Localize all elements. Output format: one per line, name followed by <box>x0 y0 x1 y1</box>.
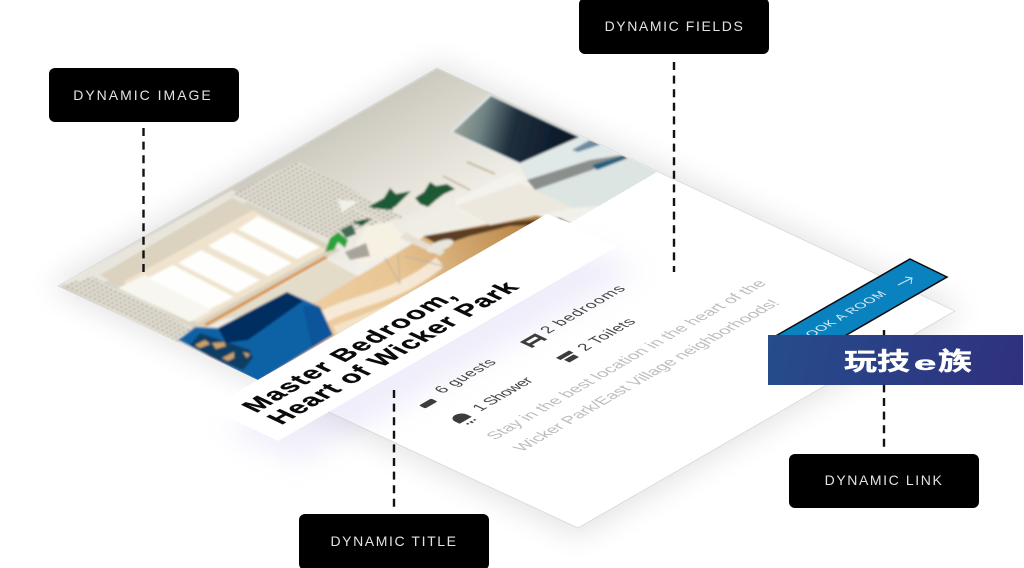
label: dynamic fields: DYNAMIC FIELDS <box>605 18 744 34</box>
icon: arrow <box>898 277 912 285</box>
pillow <box>190 333 253 370</box>
icon: bedrooms <box>523 335 546 347</box>
right cabinet <box>536 158 656 208</box>
lamp <box>338 200 360 213</box>
label: dynamic title <box>299 514 489 568</box>
dynamic fields <box>409 244 797 455</box>
button shape <box>772 259 947 356</box>
heading: listing title: Master Bedroom, <box>234 287 463 416</box>
panel: listing card <box>58 68 955 528</box>
dynamic image: room photo <box>58 68 680 400</box>
banner logo text <box>844 348 972 376</box>
icon: shower drops <box>467 419 476 425</box>
field: guests: 6 guests <box>431 357 501 396</box>
banner logo text: 族 <box>938 348 972 376</box>
label: dynamic link: DYNAMIC LINK <box>825 472 943 488</box>
description text: Wicker Park/East Village neighborhoods! <box>509 297 784 454</box>
patterned curtain <box>232 162 403 237</box>
banner logo text: e <box>914 353 936 374</box>
card base <box>58 68 955 528</box>
sill and rail <box>204 256 328 326</box>
wood floor <box>275 214 570 370</box>
white drawers <box>459 184 570 227</box>
white chair <box>358 223 398 248</box>
label: dynamic image <box>49 68 239 122</box>
icon: guests <box>419 399 437 409</box>
window recess <box>100 198 340 332</box>
banner background <box>768 335 1023 385</box>
label: dynamic link <box>789 454 979 508</box>
field: bedrooms: 2 bedrooms <box>537 283 630 336</box>
icon: toilets <box>556 350 581 363</box>
upper ledge <box>58 190 250 286</box>
window panes <box>148 216 320 309</box>
dashed connector: image <box>142 128 145 275</box>
wall picture <box>450 94 582 165</box>
field: toilets: 2 Toilets <box>574 316 640 353</box>
blue sofa <box>178 292 333 382</box>
label: dynamic title: DYNAMIC TITLE <box>330 533 458 549</box>
label: dynamic image: DYNAMIC IMAGE <box>73 87 213 103</box>
dashed connector: fields <box>673 62 675 272</box>
heading: listing title: Heart of Wicker Park <box>260 277 526 428</box>
banner logo text: 玩技 <box>844 348 910 376</box>
wall shelf <box>443 162 495 190</box>
band background <box>209 214 616 441</box>
card drop shadow <box>48 62 965 536</box>
dashed connector: link <box>883 330 885 450</box>
plants <box>352 182 455 226</box>
description text: Stay in the best location in the heart of the <box>482 278 771 442</box>
watermark banner <box>768 335 1023 385</box>
dashed connector: title <box>393 390 395 510</box>
label: dynamic fields <box>579 0 769 54</box>
dynamic link: book a room button <box>772 259 947 356</box>
button label: BOOK A ROOM <box>794 289 890 343</box>
upper wall light <box>521 138 618 180</box>
title band shadow <box>225 238 640 462</box>
wall <box>59 68 622 380</box>
lower curtain <box>62 277 195 342</box>
title band <box>209 214 616 441</box>
icon: shower <box>449 412 472 424</box>
field: shower: 1 Shower <box>469 375 538 413</box>
